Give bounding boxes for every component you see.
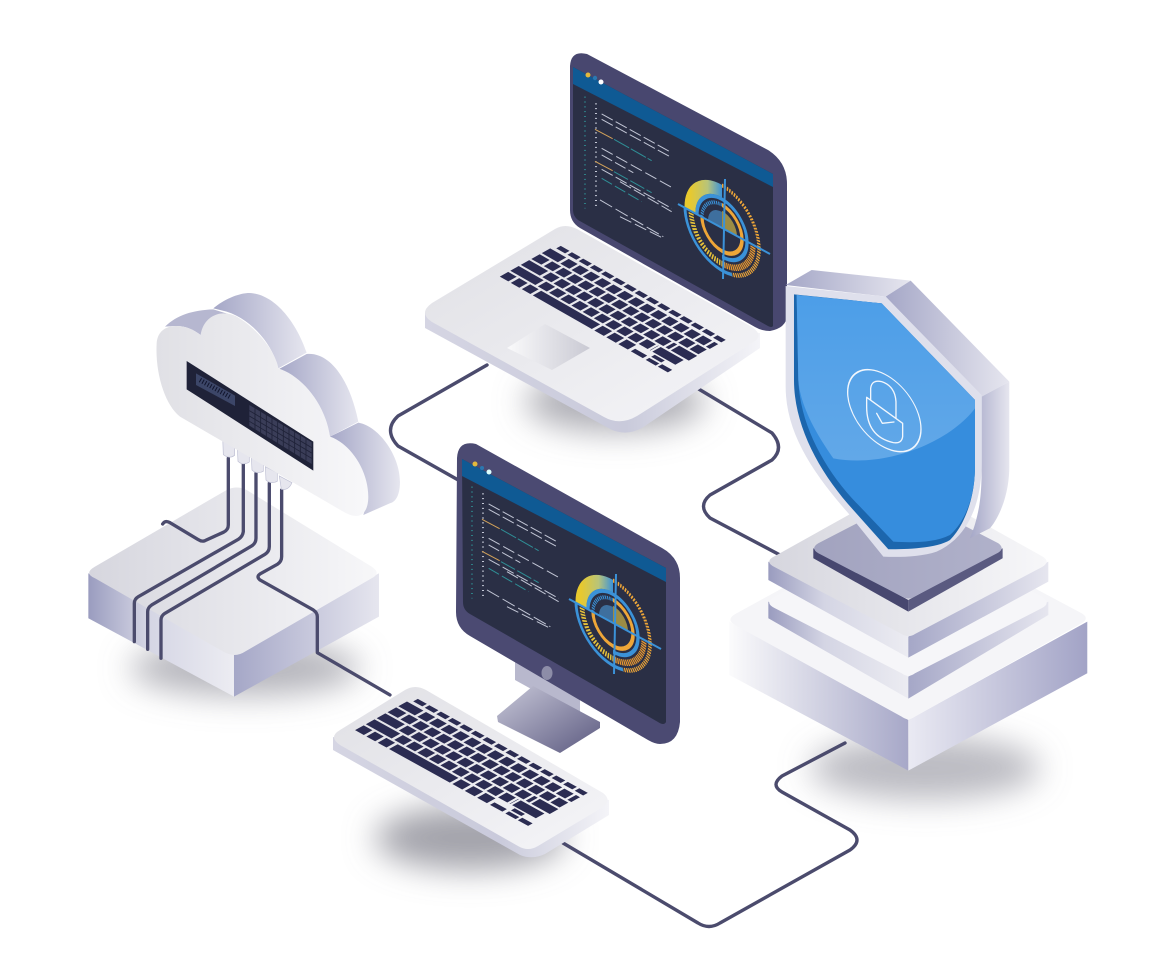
cloud: [156, 293, 400, 516]
desktop monitor: [456, 443, 680, 753]
laptop keyboard: [502, 245, 724, 371]
shield dark edge: [794, 294, 975, 549]
shield highlight: [797, 295, 975, 460]
laptop title bar: [573, 67, 773, 187]
monitor logo button: [542, 666, 552, 680]
window dots: [586, 72, 604, 84]
keyboard keys: [357, 698, 585, 825]
monitor frame: [456, 443, 680, 744]
laptop target chart: [678, 164, 770, 292]
laptop screen frame: [570, 53, 787, 331]
middle layer: [768, 602, 908, 699]
dark plate: [813, 548, 908, 612]
keyboard top: [334, 687, 608, 849]
bottom layer: [729, 622, 908, 771]
shield upper side: [886, 281, 1009, 397]
shield lower side: [970, 382, 1009, 538]
upper layer: [768, 562, 908, 658]
monitor stand: [497, 660, 600, 753]
shadows: [130, 372, 1040, 870]
lock icon: [848, 356, 921, 466]
monitor code lines: [472, 487, 560, 628]
cloud network panel: [187, 361, 313, 471]
keyboard: [333, 687, 609, 857]
cloud back lobes: [165, 309, 237, 335]
laptop: [425, 53, 787, 433]
box top surface: [89, 487, 377, 655]
shield top edge: [786, 270, 911, 297]
monitor title bar: [462, 459, 666, 582]
cloud front face: [156, 313, 368, 516]
laptop trackpad: [507, 324, 590, 370]
box right face: [234, 573, 379, 697]
network cables: [390, 365, 857, 926]
keyboard body: [333, 737, 609, 857]
monitor target chart: [569, 559, 661, 687]
monitor screen: [462, 459, 666, 724]
shield pedestal: [729, 482, 1087, 771]
shield: [786, 270, 1009, 557]
shield blue face: [797, 295, 975, 542]
server box base: [88, 458, 390, 697]
wires from cloud to box: [134, 458, 390, 695]
laptop code lines: [585, 97, 673, 238]
laptop screen: [573, 67, 773, 327]
shield border: [786, 286, 982, 557]
laptop base: [425, 226, 760, 433]
window dots: [472, 462, 492, 474]
cloud connectors: [223, 437, 292, 490]
box left face: [88, 573, 234, 697]
